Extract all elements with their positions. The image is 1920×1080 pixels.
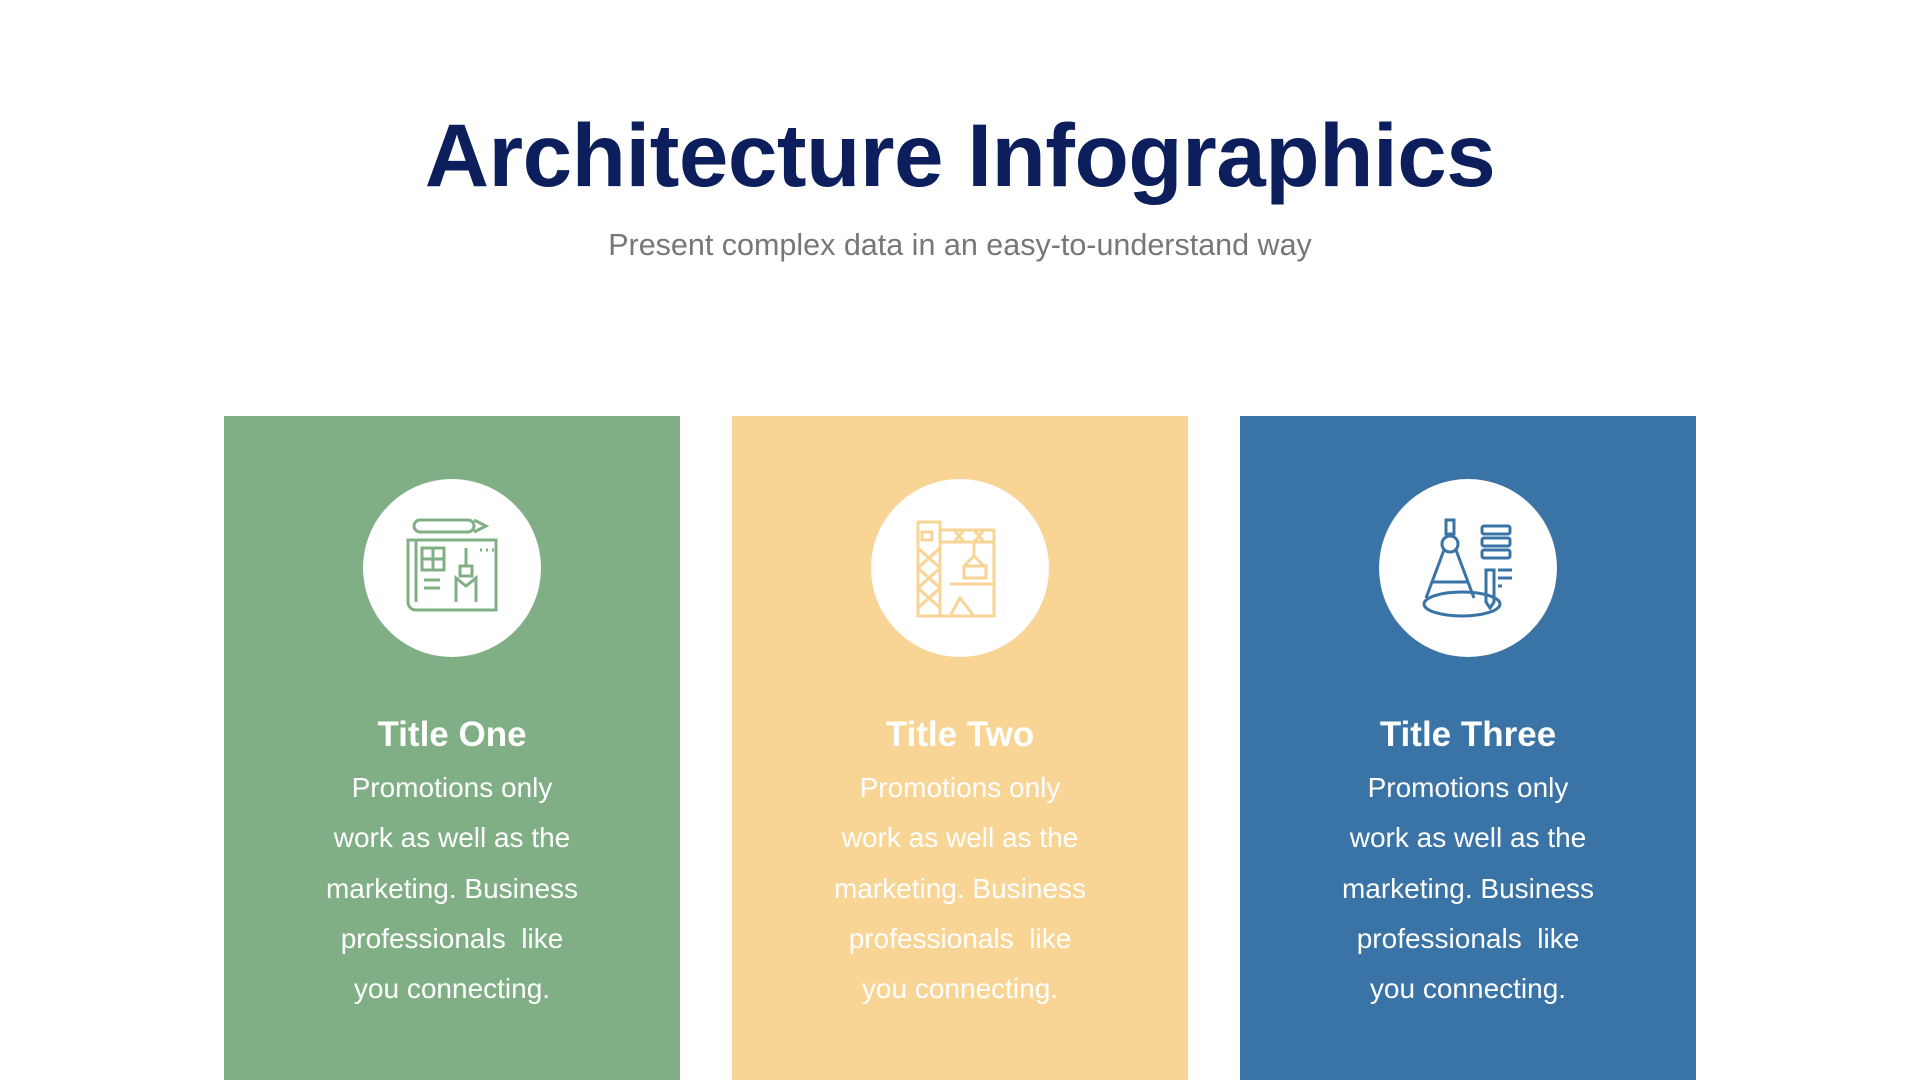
body text: work as well as the <box>1350 822 1586 853</box>
subtitle: Present complex data in an easy-to-understand way <box>608 228 1312 262</box>
body text <box>1342 772 1594 1004</box>
title: Architecture Infographics <box>425 105 1495 205</box>
heading: Title One <box>377 715 527 754</box>
panel: two <box>732 416 1188 1080</box>
body text: professionals like <box>341 923 563 954</box>
body text: professionals like <box>849 923 1071 954</box>
body text <box>326 772 578 1004</box>
body text <box>834 772 1086 1004</box>
body text: marketing. Business <box>1342 873 1594 904</box>
body text: you connecting. <box>862 973 1058 1004</box>
icon: crane <box>871 479 1049 657</box>
body text: you connecting. <box>1370 973 1566 1004</box>
body text: you connecting. <box>354 973 550 1004</box>
body text: marketing. Business <box>834 873 1086 904</box>
body text: Promotions only <box>860 772 1060 803</box>
panel: one <box>224 416 680 1080</box>
icon: compass <box>1379 479 1557 657</box>
icon: blueprint <box>363 479 541 657</box>
body text: Promotions only <box>1368 772 1568 803</box>
panel: three <box>1240 416 1696 1080</box>
body text: marketing. Business <box>326 873 578 904</box>
body text: work as well as the <box>334 822 570 853</box>
body text: work as well as the <box>842 822 1078 853</box>
heading: Title Three <box>1380 715 1556 754</box>
body text: professionals like <box>1357 923 1579 954</box>
body text: Promotions only <box>352 772 552 803</box>
heading: Title Two <box>886 715 1034 754</box>
